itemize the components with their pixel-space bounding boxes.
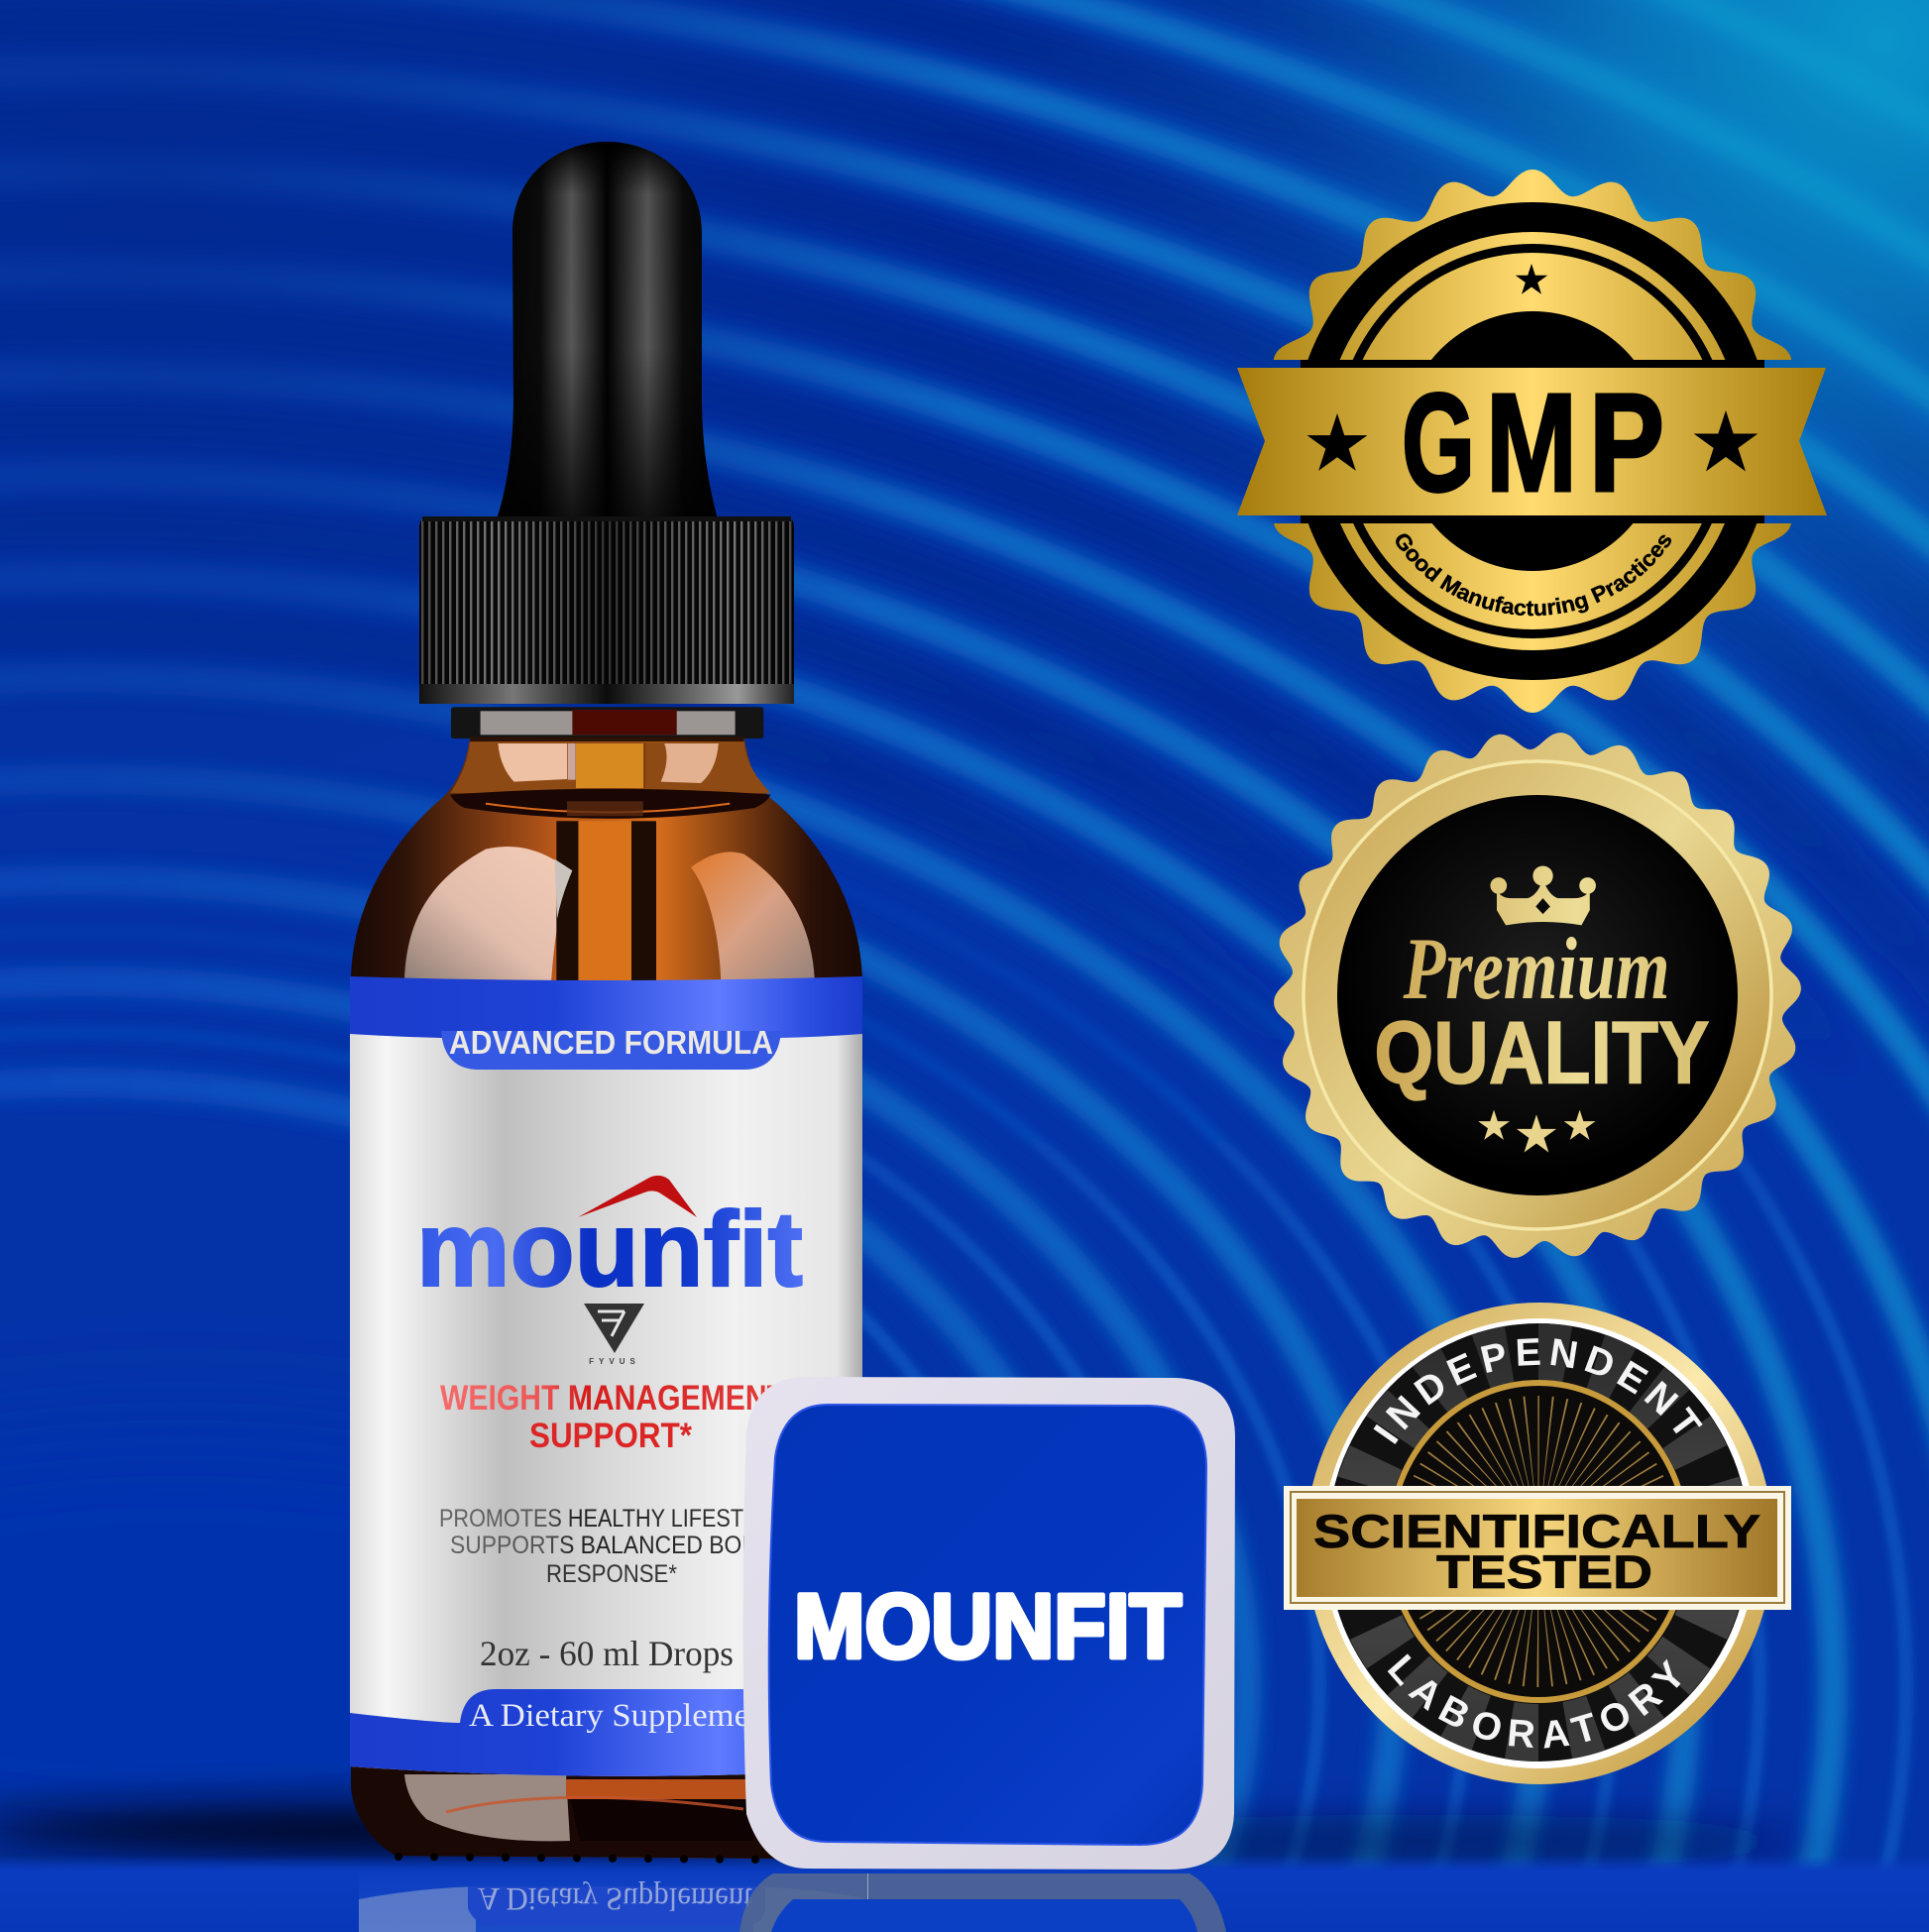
description: RESPONSE* bbox=[546, 1560, 677, 1588]
ring segments bbox=[1357, 1352, 1720, 1733]
ribbon bbox=[1237, 368, 1827, 515]
neck ring bbox=[451, 707, 763, 741]
curved caption: Good Manufacturing Practices bbox=[1396, 533, 1671, 617]
banner bbox=[1284, 1486, 1791, 1610]
crown icon bbox=[1490, 865, 1596, 925]
mounfit logo: mounfit bbox=[416, 1189, 803, 1308]
banner: TESTED bbox=[1436, 1545, 1652, 1598]
size line: 2oz - 60 ml Drops bbox=[480, 1634, 734, 1673]
product: mounfit box bbox=[743, 1377, 1235, 1870]
sunburst bbox=[1454, 1451, 1623, 1632]
top blue band bbox=[350, 976, 862, 1038]
description: SUPPORTS BALANCED BODY bbox=[450, 1532, 773, 1559]
fyvus mark bbox=[584, 1304, 644, 1366]
GMP text: M bbox=[1486, 364, 1577, 520]
GMP text: P bbox=[1589, 364, 1664, 520]
independent arc text: INDEPENDENT bbox=[1374, 1338, 1703, 1444]
glass neck and liquid bbox=[404, 741, 815, 983]
description: PROMOTES HEALTHY LIFESTYLE bbox=[439, 1505, 784, 1533]
dropper bulb bbox=[497, 142, 718, 519]
badge: GMP bbox=[1237, 170, 1827, 713]
label bbox=[350, 976, 862, 1776]
three stars bbox=[1478, 1110, 1596, 1152]
gold seal bbox=[1273, 170, 1792, 713]
bottle reflection bbox=[359, 1874, 1226, 1932]
fyvus mark: FYVUS bbox=[589, 1357, 640, 1366]
reflected label text: A Dietary Supplement bbox=[478, 1880, 752, 1916]
badge: premium quality bbox=[1269, 724, 1806, 1267]
ribbed cap bbox=[419, 516, 794, 704]
quality text: QUALITY bbox=[1374, 1003, 1710, 1102]
red claim: WEIGHT MANAGEMENT bbox=[440, 1379, 785, 1418]
description bbox=[439, 1505, 784, 1588]
GMP text: G bbox=[1402, 364, 1475, 520]
advanced formula pill: ADVANCED FORMULA bbox=[449, 1024, 773, 1061]
ribbon stars bbox=[1307, 410, 1758, 472]
bottle base bbox=[351, 1769, 862, 1860]
GMP text bbox=[1402, 364, 1664, 520]
red claim: SUPPORT* bbox=[529, 1417, 692, 1455]
product: dropper bottle bbox=[350, 142, 862, 1860]
premium script: Premium bbox=[1403, 921, 1670, 1018]
bottle glass bbox=[351, 739, 862, 1859]
box reflection bbox=[739, 1874, 1226, 1932]
badge: independent laboratory bbox=[1284, 1303, 1791, 1784]
banner: SCIENTIFICALLY bbox=[1313, 1505, 1760, 1557]
bottom blue band bbox=[350, 1689, 862, 1776]
box wordmark: MOUNFIT bbox=[794, 1576, 1182, 1677]
laboratory arc text: LABORATORY bbox=[1388, 1653, 1681, 1749]
red claim bbox=[440, 1379, 785, 1455]
top star bbox=[1516, 264, 1547, 294]
dietary supplement text: A Dietary Supplement bbox=[469, 1698, 776, 1734]
